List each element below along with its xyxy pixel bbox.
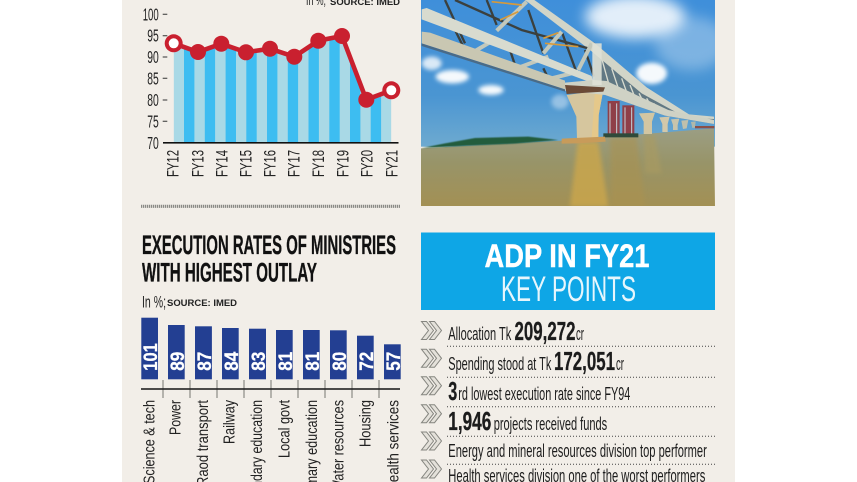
water bbox=[421, 128, 715, 207]
x axis labels: FY21 bbox=[383, 150, 401, 177]
banner: ADP in FY21 key points: ADP IN FY21 bbox=[484, 238, 650, 274]
bar category labels: Power bbox=[167, 400, 184, 435]
point 2: spending: Spending stood at Tk bbox=[448, 353, 552, 374]
y axis labels: 75 bbox=[147, 111, 159, 131]
steel truss bbox=[422, 0, 714, 124]
heading: execution rates of ministries: EXECUTION RATES OF MINISTRIES bbox=[142, 230, 396, 260]
bar category labels: Housing bbox=[358, 400, 374, 447]
light diagonals bbox=[468, 2, 592, 78]
bar values: 81 bbox=[303, 351, 324, 371]
bridge piers bbox=[567, 90, 603, 139]
bar chart source note: SOURCE: IMED bbox=[167, 298, 237, 309]
bar category labels: Science & tech bbox=[142, 400, 159, 482]
photo: Padma bridge over the river bbox=[421, 0, 728, 207]
baseline bbox=[163, 142, 398, 144]
bar chart: ministries execution rates bbox=[141, 318, 405, 482]
y axis labels: 85 bbox=[147, 68, 159, 88]
bar chart source note bbox=[142, 294, 237, 312]
striped area bars bbox=[174, 40, 392, 142]
y axis labels: 100 bbox=[143, 4, 159, 24]
x axis labels: FY15 bbox=[238, 150, 256, 177]
bar category labels bbox=[142, 399, 402, 482]
x axis labels: FY17 bbox=[286, 150, 304, 177]
far bank trees bbox=[422, 137, 558, 148]
x axis labels: FY12 bbox=[165, 150, 183, 177]
point 1: allocation bbox=[422, 316, 584, 346]
point 2: spending: cr bbox=[616, 353, 624, 374]
bar chart source note: In %; bbox=[142, 294, 166, 312]
banner: ADP in FY21 key points: KEY POINTS bbox=[501, 270, 636, 309]
bar values: 89 bbox=[168, 352, 189, 371]
point 1: allocation: cr bbox=[576, 323, 584, 344]
x axis labels: FY19 bbox=[334, 150, 352, 177]
far span lattice bbox=[593, 42, 714, 124]
y axis labels bbox=[143, 4, 159, 153]
y axis labels: 80 bbox=[147, 90, 159, 110]
bar values: 81 bbox=[276, 351, 297, 371]
heading: execution rates of ministries: WITH HIGHEST OUTLAY bbox=[142, 258, 317, 288]
bar values: 84 bbox=[222, 351, 243, 371]
bar values: 87 bbox=[195, 352, 216, 371]
point 1: allocation: 209,272 bbox=[514, 316, 576, 346]
dark inner members bbox=[445, 0, 594, 77]
point 3: third lowest execution rate bbox=[422, 376, 630, 406]
bar values: 57 bbox=[384, 352, 405, 371]
key points list bbox=[422, 316, 715, 482]
bar values: 72 bbox=[357, 352, 378, 371]
point 4: projects received funds: 1,946 bbox=[448, 406, 491, 436]
heading: execution rates of ministries bbox=[142, 230, 396, 288]
point 6: worst performer bbox=[422, 460, 705, 482]
point 5: top performer bbox=[422, 432, 707, 461]
line chart: execution rate FY12 to FY21 bbox=[143, 0, 401, 177]
bars bbox=[141, 318, 401, 379]
x axis labels: FY20 bbox=[359, 150, 377, 177]
x axis labels: FY16 bbox=[261, 150, 279, 177]
bar category labels: Local govt bbox=[276, 399, 293, 458]
scaffold towers bbox=[608, 101, 620, 135]
bar values: 80 bbox=[330, 352, 351, 371]
point 4: projects received funds: projects received funds bbox=[494, 413, 607, 434]
point 1: allocation: Allocation Tk bbox=[448, 323, 512, 344]
point 2: spending: 172,051 bbox=[554, 346, 615, 376]
point 3: third lowest execution rate: rd lowest execution rate since FY94 bbox=[458, 383, 630, 404]
bar values: 101 bbox=[141, 343, 162, 371]
reflections bbox=[570, 142, 608, 207]
axis line bbox=[141, 388, 400, 390]
red trend line with markers bbox=[165, 28, 400, 108]
x axis labels: FY13 bbox=[190, 150, 208, 177]
sky clouds bbox=[422, 0, 728, 109]
x axis labels: FY14 bbox=[213, 150, 231, 177]
background panel bbox=[122, 0, 735, 482]
bar values bbox=[141, 343, 405, 371]
bar category labels: Railway bbox=[222, 400, 239, 444]
y axis labels: 90 bbox=[147, 47, 159, 67]
chart source note bbox=[306, 0, 400, 9]
point 3: third lowest execution rate: 3 bbox=[448, 376, 457, 406]
y axis labels: 95 bbox=[147, 26, 159, 46]
point 2: spending bbox=[422, 346, 624, 376]
x axis labels bbox=[165, 150, 401, 177]
y axis labels: 70 bbox=[147, 133, 159, 153]
x axis labels: FY18 bbox=[310, 150, 328, 177]
banner: ADP in FY21 key points bbox=[421, 232, 715, 310]
bar values: 83 bbox=[249, 352, 270, 371]
point 4: projects received funds bbox=[422, 405, 607, 436]
